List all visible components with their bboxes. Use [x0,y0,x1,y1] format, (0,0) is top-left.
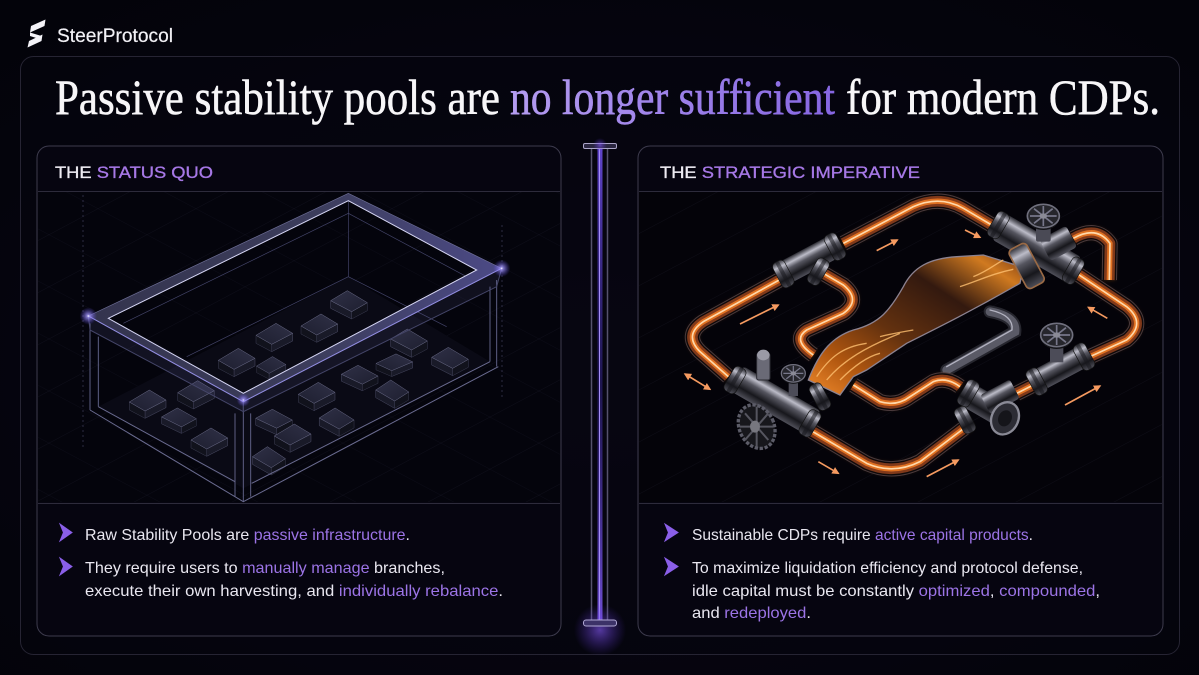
bullet icon [60,524,72,541]
arrow: bottom flow [927,460,958,477]
text: passive infrastructure: Raw Stability Pools are passive infrastructure. [85,527,410,544]
text: manual management: execute their own harvesting, and individually rebalance . [85,583,503,600]
text: active capital products: Sustainable CDPs require active capital products. [692,527,1033,544]
bullet icon [665,524,678,541]
title: Passive stability pools are [55,69,500,125]
illustration: glass tank with idle blocks [80,193,510,502]
panel frame [638,146,1163,636]
tank floor [98,277,490,488]
text: optimized capital: and redeployed. [692,605,811,622]
arrow: right pipe flow [1088,307,1107,318]
bullet icon [665,558,678,575]
brand logo [28,20,173,48]
liquid ribbon [808,255,1023,395]
arrow: lower right flow [1065,386,1100,405]
brand name: SteerProtocol [57,26,173,47]
text: optimized capital: idle capital must be constantly optimized, compounded, [692,583,1100,600]
pipe fittings [722,204,1096,455]
text: optimized capital: To maximize liquidation efficiency and protocol defense, [692,560,1083,577]
arrow: left two-way flow [685,374,710,389]
tank walls [88,268,502,502]
copper pipes [692,201,1137,469]
panel heading: THE STRATEGIC IMPERATIVE [660,163,920,182]
pillar bottom cap [574,604,626,656]
text: manual management [85,560,503,600]
idle blocks [129,291,468,475]
pillar top cap [584,144,616,148]
central glowing pillar [574,138,626,656]
fitting: top left [771,231,847,289]
arrow: left pipe flow [740,305,778,324]
text: optimized capital [692,560,1100,622]
title: no longer sufficient [510,69,835,125]
panel heading: THE STATUS QUO [55,163,213,182]
fitting: top right [986,204,1086,290]
fitting: bottom left [722,350,832,455]
illustration: active copper pipe loop [685,201,1137,477]
gray return pipe [947,310,1015,370]
arrow: top right flow [965,230,980,237]
glowing rim [88,193,502,402]
fitting: bottom right [953,378,1024,439]
flow arrows [685,230,1107,477]
panel: the status quo [37,146,561,636]
text: manual management: They require users to manually manage branches, [85,560,445,577]
title [55,69,1160,125]
bullet icon [60,558,72,575]
icon: steer mark [28,20,46,48]
arrow: top pipe flow [877,240,897,251]
fitting: right valve [1024,323,1096,397]
arrow: bottom left flow [818,462,838,473]
panel frame [37,146,561,636]
panel: the strategic imperative [638,146,1163,636]
